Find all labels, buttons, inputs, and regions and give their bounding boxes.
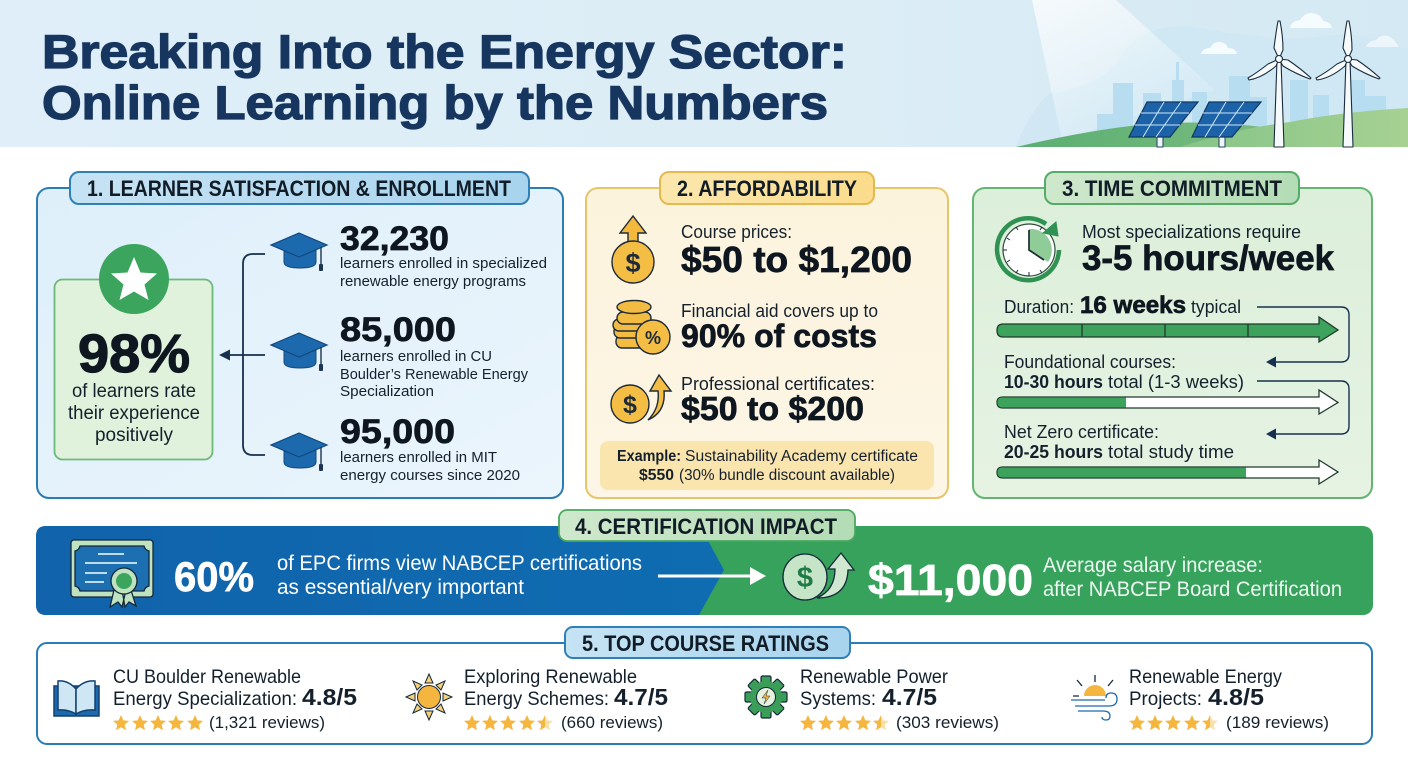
heading: section 2: 2. AFFORDABILITY — [677, 176, 857, 201]
callout: 98 percent: of learners rate — [72, 381, 196, 402]
text: professional certificates — [681, 374, 875, 427]
course: Renewable Power Systems: (303 reviews) — [896, 713, 999, 732]
text: financial aid — [681, 301, 878, 354]
text: net zero certificate: Net Zero certificate: — [1004, 422, 1159, 442]
text: foundational courses: total (1-3 weeks) — [1108, 372, 1244, 392]
course: Renewable Power Systems: 4.7/5 — [882, 684, 937, 710]
icon: sun — [406, 674, 452, 720]
stat: salary increase: Average salary increase: — [1043, 553, 1263, 577]
title: Online Learning by the Numbers — [42, 76, 828, 129]
callout: example certificate: $550 — [639, 467, 674, 484]
course: Exploring Renewable Energy Schemes: 4.7/5 — [614, 684, 668, 710]
icon: salary increase: $ — [797, 562, 813, 594]
stat: 85,000: Specialization — [340, 383, 434, 400]
callout: example certificate: Example: — [617, 448, 681, 465]
callout: example certificate: Sustainability Academy certificate — [685, 448, 918, 465]
course: CU Boulder: 4.8/5 — [302, 684, 357, 710]
course: CU Boulder: (1,321 reviews) — [209, 713, 325, 732]
stat: 85,000: 85,000 — [340, 311, 456, 349]
course: Renewable Energy Projects: Renewable Energy — [1129, 666, 1282, 688]
green hills — [1016, 122, 1300, 147]
course: Renewable Energy Projects: 4.8/5 — [1208, 684, 1264, 710]
course: CU Boulder: CU Boulder Renewable — [113, 666, 301, 688]
panel: affordability — [586, 172, 948, 498]
stat: 60 percent: 60% — [174, 553, 254, 600]
panel: certification impact — [36, 510, 1373, 615]
stat: salary increase: after NABCEP Board Certification — [1043, 577, 1342, 601]
text: duration: Duration: — [1004, 297, 1074, 317]
icon: salary increase — [783, 553, 854, 600]
arrow: connector two — [1257, 381, 1349, 440]
header banner — [0, 0, 1408, 147]
text: course prices — [681, 222, 912, 280]
stat: 32,230: renewable energy programs — [340, 273, 526, 290]
icon: coin with up arrow: $ — [623, 391, 637, 419]
course: Renewable Power Systems: Renewable Power — [800, 666, 948, 688]
text: course prices: $50 to $1,200 — [681, 239, 912, 280]
callout: 98 percent — [54, 244, 212, 460]
text: foundational courses — [1004, 352, 1244, 392]
stat: 85,000: Boulder’s Renewable Energy — [340, 366, 528, 383]
panel: learner satisfaction and enrollment — [37, 172, 563, 498]
course: Renewable Energy Projects — [1071, 666, 1329, 732]
text: net zero certificate: 20-25 hours — [1004, 442, 1103, 462]
arrow: connector one — [1257, 307, 1349, 368]
icon: clock — [997, 218, 1059, 280]
heading: section 5: 5. TOP COURSE RATINGS — [582, 631, 829, 656]
icon: sun and wind — [1071, 675, 1117, 720]
stat: 95,000 — [271, 413, 520, 484]
arrow: bracket to 98 percent — [219, 254, 265, 455]
stat: 95,000: 95,000 — [340, 413, 455, 451]
course: Exploring Renewable Energy Schemes: (660 reviews) — [561, 713, 663, 732]
text: hours per week — [1082, 222, 1335, 278]
illustration: renewable landscape — [1016, 0, 1408, 147]
course: Renewable Energy Projects: Projects: — [1129, 688, 1202, 710]
stat: 32,230 — [271, 220, 547, 290]
text: financial aid: 90% of costs — [681, 318, 877, 354]
heading: section 3: 3. TIME COMMITMENT — [1062, 176, 1283, 201]
stat: 32,230: learners enrolled in specialized — [340, 255, 547, 272]
title: Breaking Into the Energy Sector: — [42, 25, 847, 78]
arrow: duration bar — [997, 317, 1338, 342]
stat: salary increase: $11,000 — [868, 556, 1033, 605]
course: Renewable Power Systems: Systems: — [800, 688, 876, 710]
course: CU Boulder: Energy Specialization: — [113, 688, 297, 710]
stat: 85,000 — [271, 311, 528, 400]
course: Exploring Renewable Energy Schemes: Energy Schemes: — [464, 688, 609, 710]
icon: money bag with up arrow: $ — [625, 248, 641, 278]
stat: 60 percent: of EPC firms view NABCEP certifications — [277, 551, 642, 575]
callout: 98 percent: 98% — [78, 324, 190, 384]
text: net zero certificate — [1004, 422, 1234, 462]
text: hours per week: Most specializations require — [1082, 222, 1301, 242]
stat: 85,000: learners enrolled in CU — [340, 348, 492, 365]
stat: salary increase — [868, 553, 1342, 605]
wind turbines — [1248, 21, 1380, 147]
solar panels — [1129, 102, 1261, 147]
text: duration: typical — [1191, 297, 1241, 317]
callout: example certificate: (30% bundle discount available) — [679, 467, 895, 484]
callout: 98 percent: positively — [95, 425, 173, 446]
text: professional certificates: $50 to $200 — [681, 390, 864, 427]
icon: gear with bolt — [745, 676, 787, 718]
panel: time commitment — [973, 172, 1372, 498]
course: Exploring Renewable Energy Schemes: Exploring Renewable — [464, 666, 637, 688]
text: financial aid: Financial aid covers up to — [681, 301, 878, 321]
clouds — [1201, 13, 1399, 54]
icon: certificate — [71, 540, 153, 607]
icon: coin stack with percent — [613, 300, 670, 354]
icon: money bag with up arrow — [612, 216, 654, 283]
text: net zero certificate: total study time — [1108, 442, 1234, 462]
arrow: foundational bar — [997, 390, 1338, 414]
course: Renewable Energy Projects: (189 reviews) — [1226, 713, 1329, 732]
skyline — [1097, 62, 1386, 147]
heading: section 1: 1. LEARNER SATISFACTION & ENROLLMENT — [87, 176, 511, 201]
text: foundational courses: 10-30 hours — [1004, 372, 1103, 392]
icon: coin with up arrow — [611, 375, 671, 423]
callout: 98 percent: their experience — [68, 403, 200, 424]
text: foundational courses: Foundational courses: — [1004, 352, 1176, 372]
arrow: net zero bar — [997, 460, 1338, 484]
text: course prices: Course prices: — [681, 222, 792, 242]
stat: 95,000: learners enrolled in MIT — [340, 449, 497, 466]
stat: 95,000: energy courses since 2020 — [340, 467, 520, 484]
course: CU Boulder — [54, 666, 357, 732]
stat: 60 percent — [174, 551, 642, 600]
heading: section 4: 4. CERTIFICATION IMPACT — [575, 514, 838, 539]
text: duration — [1004, 292, 1241, 319]
icon: open book — [54, 681, 99, 716]
panel: top course ratings — [37, 627, 1372, 744]
course: Renewable Power Systems — [745, 666, 999, 732]
title — [42, 25, 847, 129]
course: Exploring Renewable Energy Schemes — [406, 666, 668, 732]
text: hours per week: 3-5 hours/week — [1082, 239, 1335, 278]
callout: example certificate — [600, 441, 934, 490]
stat: 60 percent: as essential/very important — [277, 575, 524, 599]
arrow: impact — [658, 567, 766, 585]
text: professional certificates: Professional certificates: — [681, 374, 875, 394]
text: duration: 16 weeks — [1080, 292, 1186, 319]
icon: coin stack with percent: % — [645, 328, 661, 348]
stat: 32,230: 32,230 — [340, 220, 449, 258]
